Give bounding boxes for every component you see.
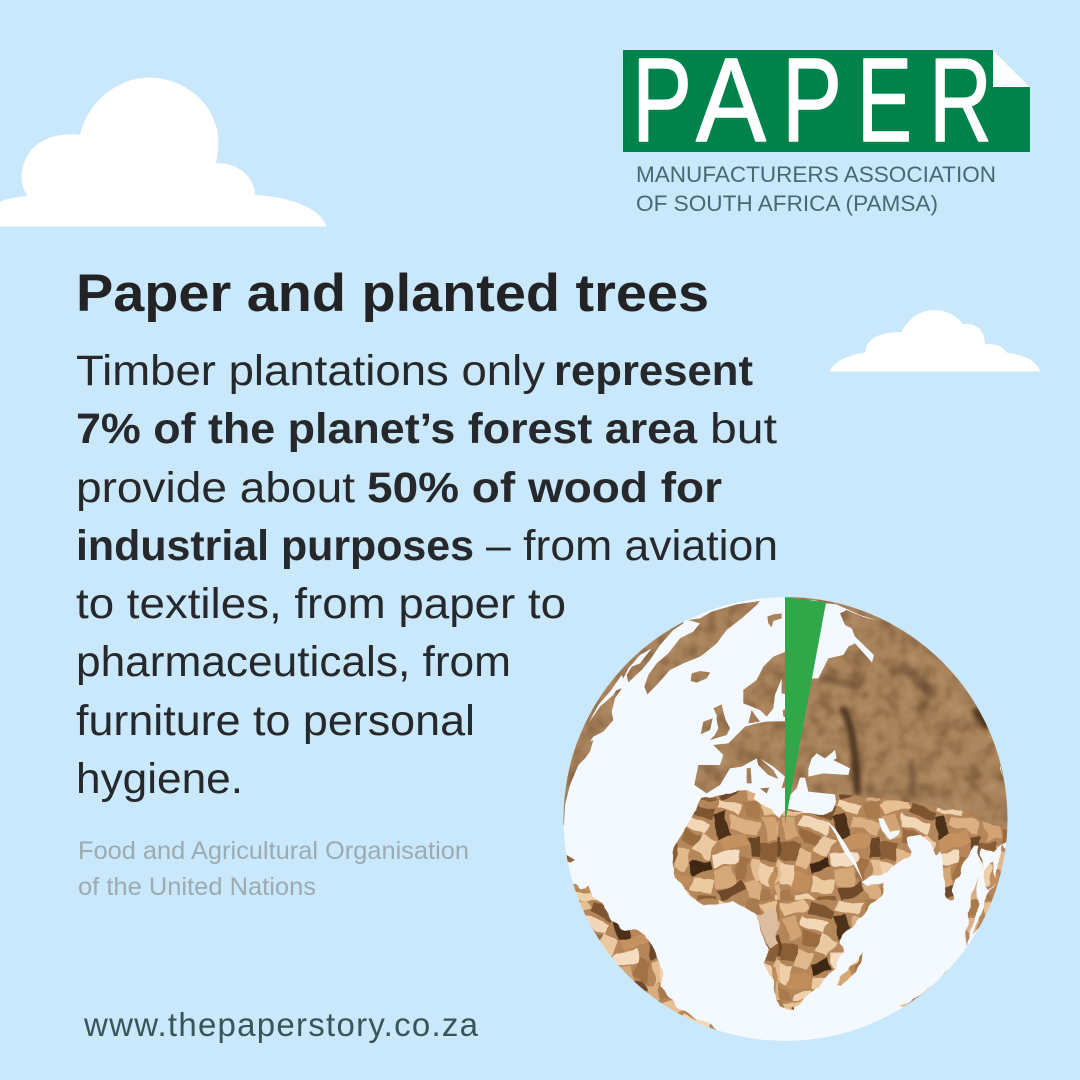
land: Madagascar (838, 954, 863, 986)
body text: Timber plantations only (76, 347, 546, 395)
land: wood-texture north (553, 595, 1015, 845)
source credit: Food and Agricultural Organisation (78, 837, 469, 865)
body text: industrial purposes (76, 522, 474, 570)
body text: 50% of wood for (367, 464, 722, 512)
cloud: top left (0, 78, 327, 227)
source credit (78, 837, 469, 901)
body text: represent (554, 347, 753, 395)
Red Sea and Persian Gulf (827, 818, 900, 882)
body text (76, 347, 778, 803)
logo subtitle: OF SOUTH AFRICA (PAMSA) (636, 191, 938, 216)
land: coastal fleck (566, 855, 575, 863)
logo subtitle: MANUFACTURERS ASSOCIATION (636, 162, 996, 187)
logo: PAPER: R (929, 34, 992, 167)
logo: PAPER (623, 34, 1030, 167)
land: wood-chip south (553, 792, 1013, 1040)
dark furrows in the wood texture (823, 667, 986, 795)
body text: pharmaceuticals, from (76, 638, 511, 686)
logo subtitle (636, 162, 996, 216)
title: Paper and planted trees (76, 264, 709, 323)
land: East Africa, Arabia and Asia (777, 793, 1013, 1007)
thin sea sliver along the Canadian rim (588, 675, 623, 723)
globe illustration (553, 595, 1015, 1041)
body text: but (710, 405, 777, 453)
land: South America (573, 884, 717, 1030)
logo: PAPER: P (632, 34, 692, 167)
body text: 7% of the planet’s forest area (76, 405, 698, 453)
ocean (564, 597, 1008, 1041)
7 percent wedge (785, 598, 826, 824)
land: West Africa (672, 792, 793, 1008)
seas over the north (787, 600, 1003, 815)
body text: – from aviation (486, 522, 778, 570)
cloud: right (830, 310, 1040, 372)
body text: furniture to personal (76, 697, 475, 745)
logo: PAPER: A (696, 34, 767, 167)
source credit: of the United Nations (78, 873, 316, 901)
body text: provide about (76, 464, 355, 512)
website url: www.thepaperstory.co.za (83, 1006, 479, 1043)
land: Indochina and Malaya (900, 843, 1013, 1011)
light patch in West Africa (756, 907, 778, 948)
logo: PAPER: E (857, 34, 912, 167)
body text: hygiene. (76, 755, 243, 803)
logo: PAPER: P (782, 34, 842, 167)
body text: to textiles, from paper to (76, 580, 566, 628)
